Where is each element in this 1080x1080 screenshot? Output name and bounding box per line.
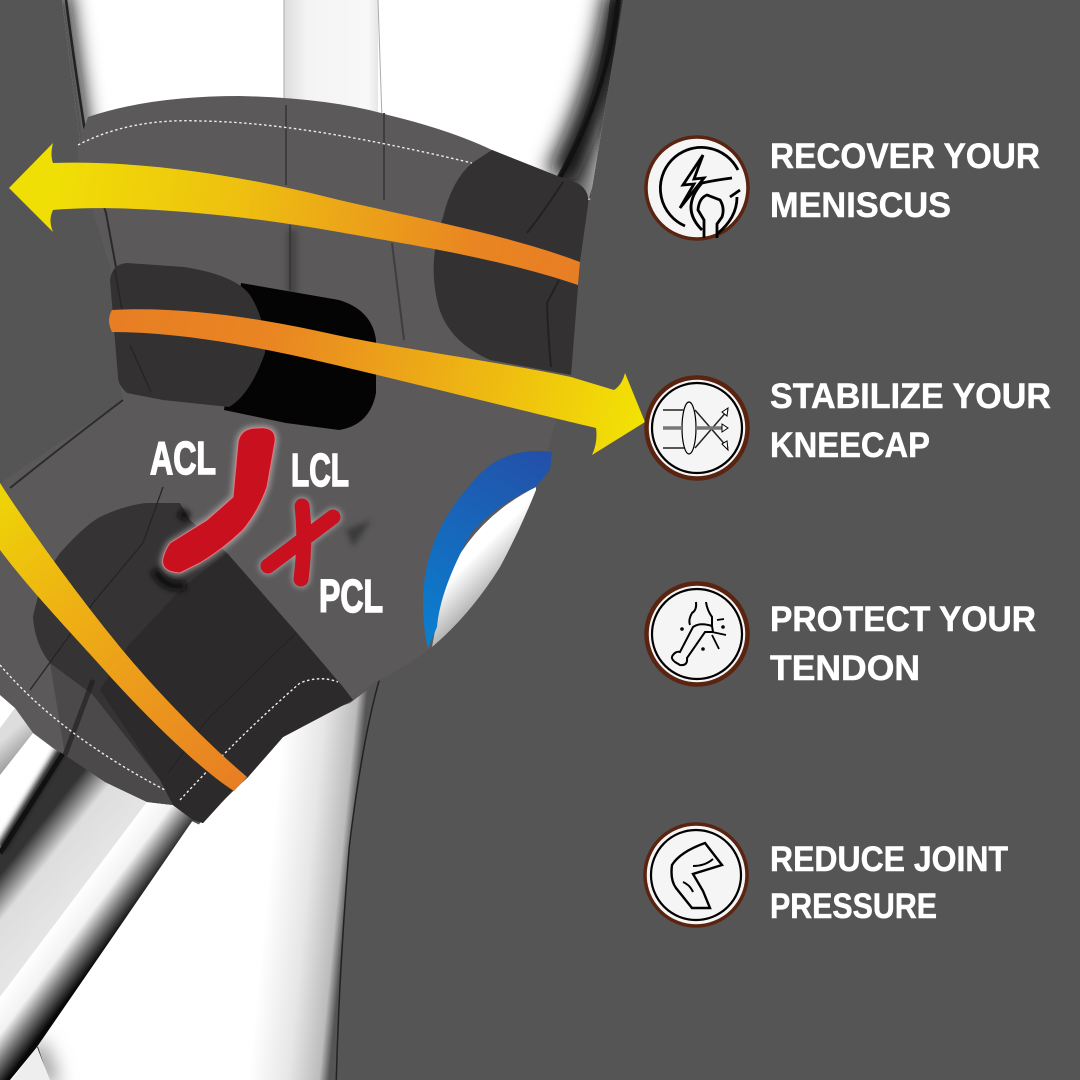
- arrow: lower strap: [0, 483, 247, 791]
- white band: [0, 802, 193, 1080]
- text: reduce joint pressure: PRESSURE: [770, 887, 937, 926]
- icon: tendon: [646, 584, 748, 684]
- text: protect your tendon: TENDON: [770, 649, 920, 688]
- label: LCL: LCL: [291, 444, 349, 496]
- arrow: top left-pointing: [9, 143, 580, 285]
- blue crescent: [423, 451, 552, 648]
- lower leg: [0, 680, 380, 1080]
- grey fold under lower pad: [50, 663, 173, 805]
- text: stabilize your kneecap: KNEECAP: [770, 426, 930, 465]
- white crescent: [432, 487, 536, 647]
- calf: [37, 680, 380, 1080]
- dotted stitching: [0, 121, 472, 800]
- dark pad: black centre: [224, 283, 376, 430]
- text: protect your tendon: [770, 600, 1036, 688]
- shadow near ligament: [155, 512, 188, 586]
- text: reduce joint pressure: [770, 840, 1008, 926]
- dark pad: upper right: [434, 150, 588, 375]
- text: stabilize your kneecap: STABILIZE YOUR: [770, 377, 1051, 416]
- ligament: PCL / LCL cross: [268, 506, 333, 579]
- icon: kneecap: [646, 378, 748, 478]
- ligament: ACL: [163, 428, 275, 573]
- text: protect your tendon: PROTECT YOUR: [770, 600, 1036, 639]
- text: recover your meniscus: RECOVER YOUR: [770, 137, 1040, 176]
- dark pad: left: [110, 263, 265, 407]
- icon: joint pressure: [645, 824, 747, 926]
- dark pad: lower blob: [33, 503, 353, 823]
- label: PCL: PCL: [319, 570, 383, 622]
- label: ACL: ACL: [150, 432, 216, 484]
- upper leg: [58, 0, 625, 200]
- arrow: right-pointing: [109, 309, 645, 455]
- mesh panel: [0, 750, 147, 997]
- upper strap strip: [0, 708, 33, 775]
- panel: knee sleeve: [0, 96, 588, 823]
- fold lines: [286, 105, 404, 340]
- icon: meniscus: [646, 137, 748, 239]
- text: stabilize your kneecap: [770, 377, 1051, 465]
- text: recover your meniscus: MENISCUS: [770, 186, 951, 225]
- text: reduce joint pressure: REDUCE JOINT: [770, 840, 1008, 879]
- text: recover your meniscus: [770, 137, 1040, 225]
- dark strip: [100, 553, 353, 823]
